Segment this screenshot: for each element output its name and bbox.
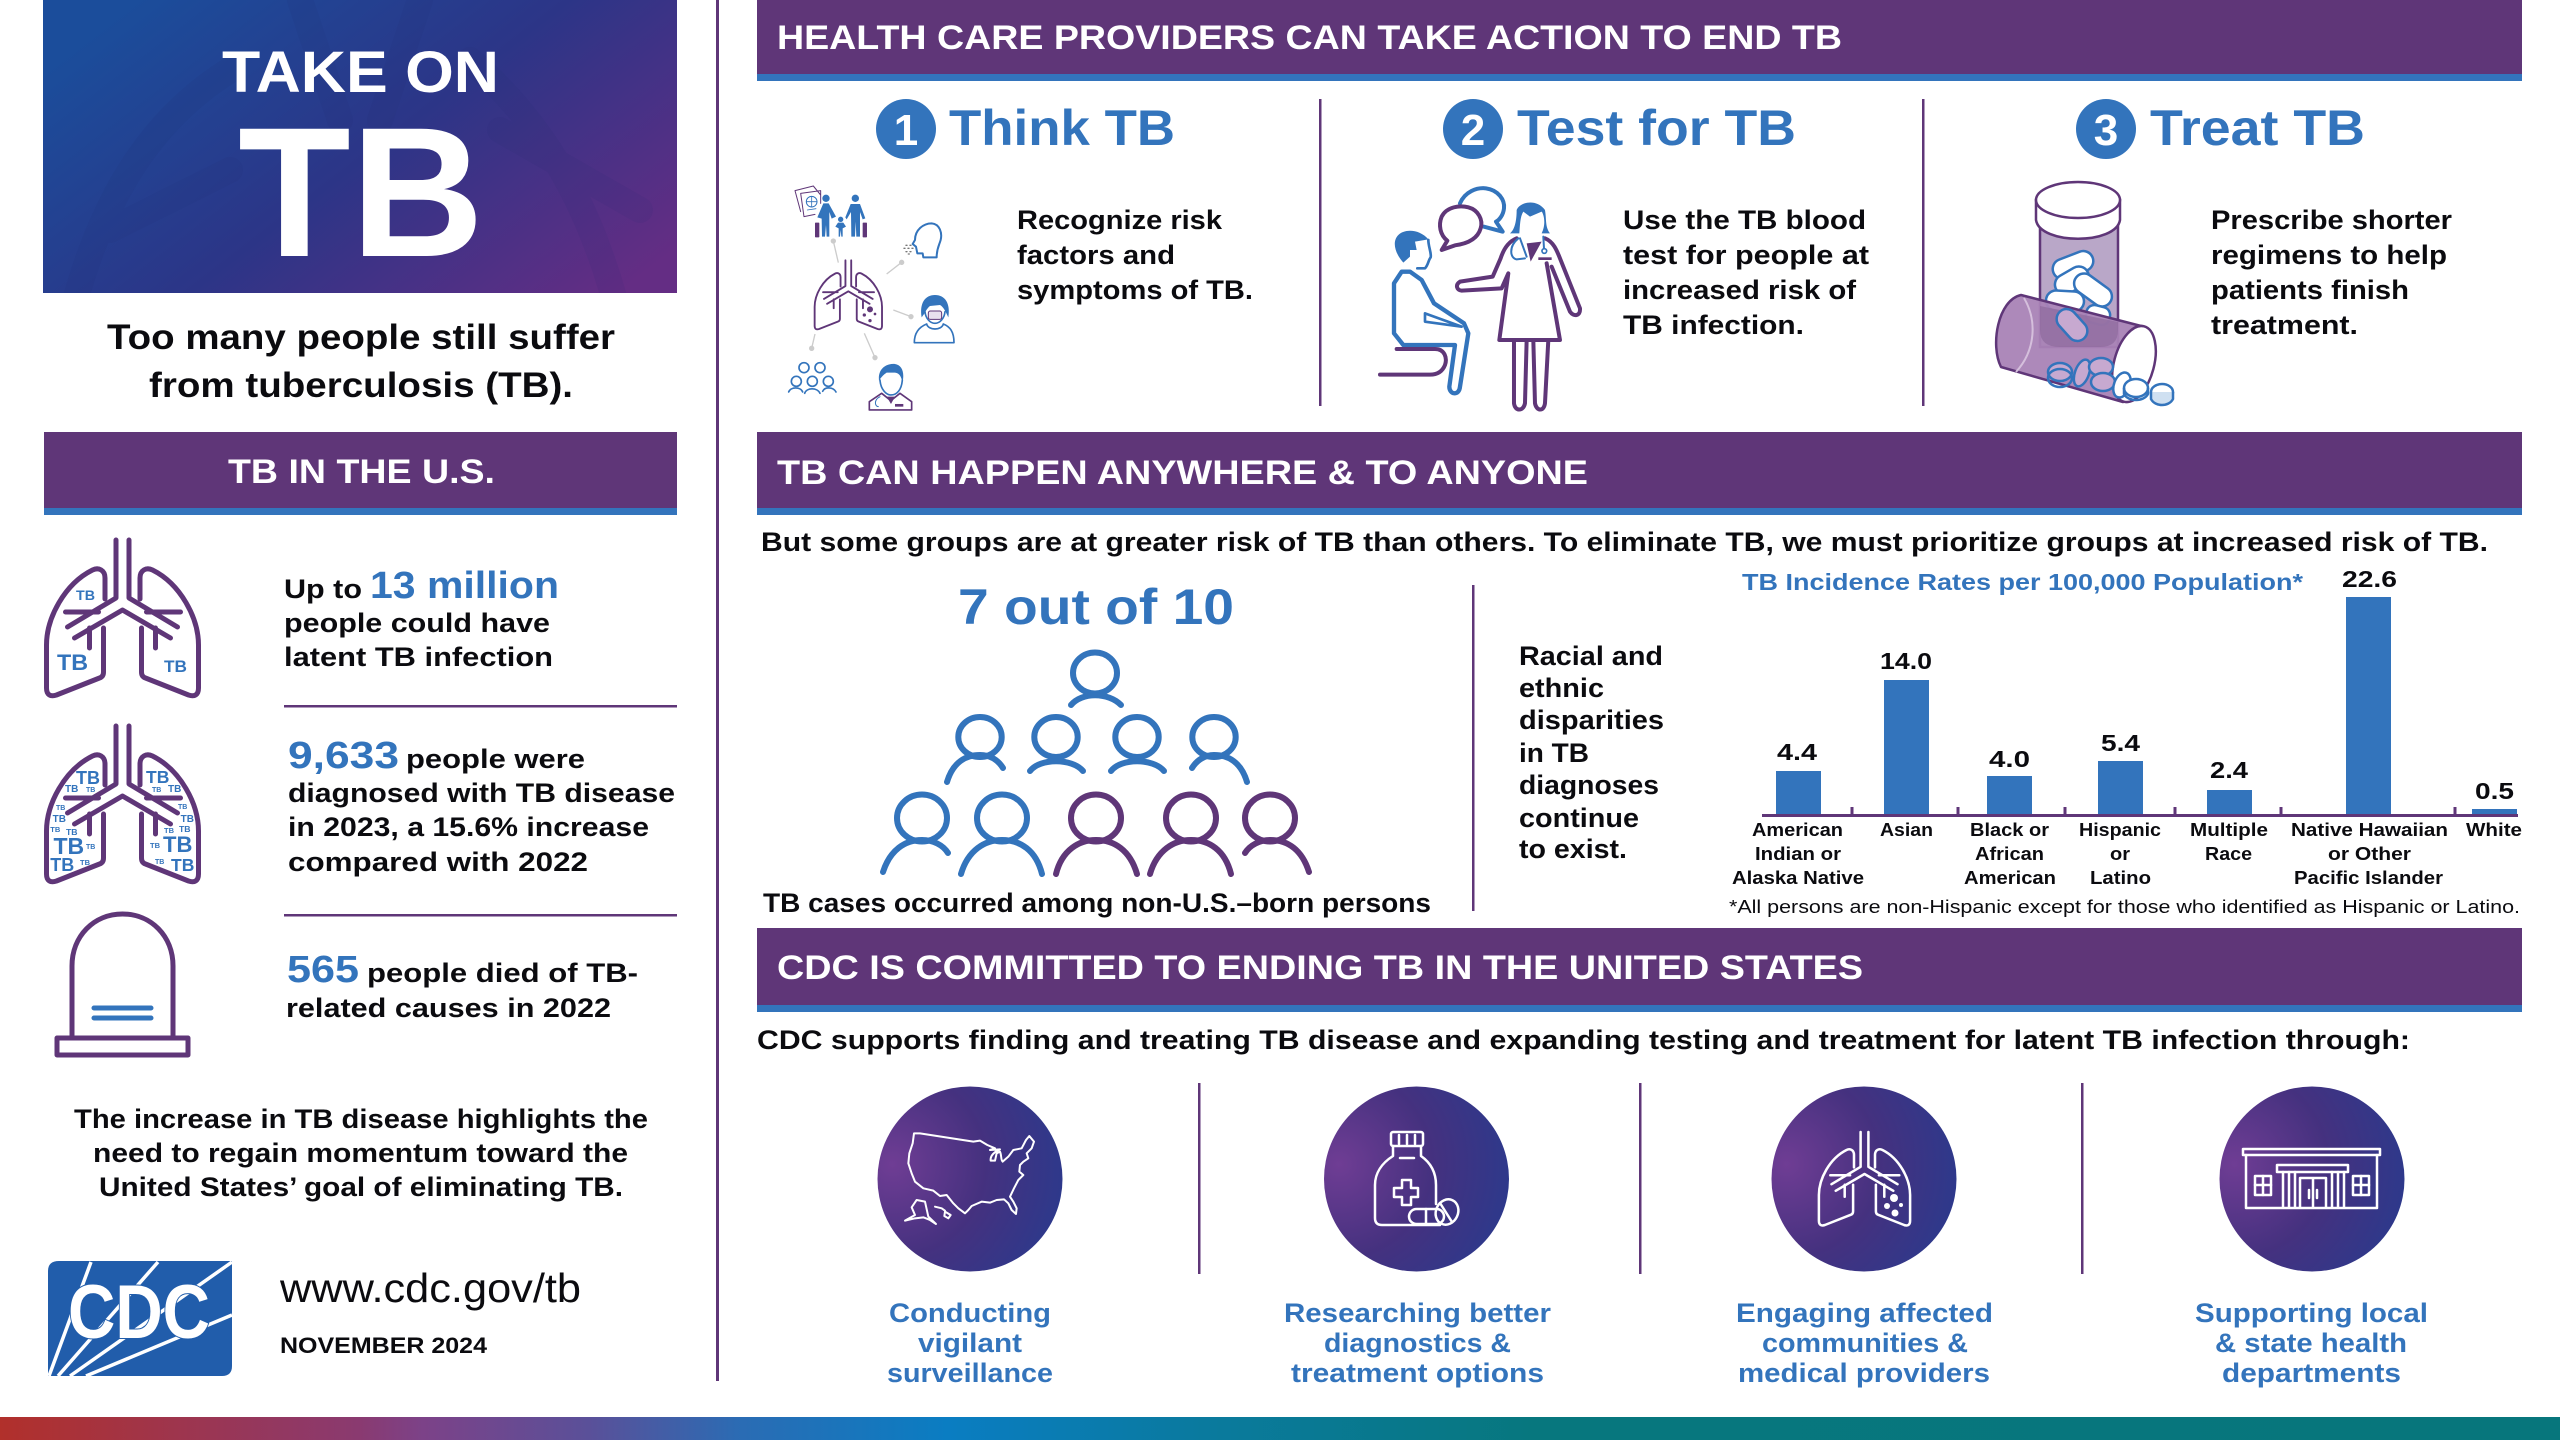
step 1 heading	[876, 99, 1175, 159]
stat: 13 million: Up to	[284, 574, 362, 604]
icon: group of people	[789, 363, 836, 393]
stat: 565: 565	[287, 949, 359, 991]
step 2 heading	[1443, 99, 1796, 159]
category labels: Latino	[2090, 868, 2151, 888]
step 3 text: regimens to help	[2211, 240, 2447, 270]
subtitle: from tuberculosis (TB).	[149, 366, 573, 405]
stat: 9,633: diagnosed with TB disease	[288, 778, 675, 808]
stat: 13 million: latent TB infection	[284, 642, 553, 672]
icon: lungs full of TB: TB	[181, 814, 194, 825]
heading: TB in the U.S.: TB IN THE U.S.	[228, 453, 495, 491]
subtitle: Too many people still suffer	[107, 318, 615, 357]
icon: lungs full of TB: TB	[66, 827, 78, 837]
closing statement: United States’ goal of eliminating TB.	[99, 1172, 623, 1202]
icon: doctor	[869, 364, 912, 410]
icon: lungs full of TB: TB	[80, 858, 91, 867]
category labels: Multiple	[2190, 820, 2268, 840]
stat: 9,633: 9,633	[288, 735, 399, 777]
step 1 heading: 1	[894, 106, 918, 155]
icon: lungs full of TB: TB	[86, 787, 95, 794]
intro sentence: But some groups are at greater risk of TB than others. To eliminate TB, we must prioritize groups at increased risk of TB.	[761, 527, 2488, 557]
values: 5.4	[2101, 730, 2140, 756]
icon: lungs full of TB: TB	[171, 855, 194, 875]
step 3 text: Prescribe shorter	[2211, 205, 2453, 235]
subtitle	[107, 318, 615, 405]
title: TAKE ON	[222, 40, 499, 105]
footnote: *All persons are non-Hispanic except for those who identified as Hispanic or Latino.	[1729, 897, 2520, 917]
icon: lungs full of TB: TB	[178, 804, 187, 811]
panel: CDC commitment	[757, 928, 2522, 1388]
category labels: American	[1752, 820, 1843, 840]
icon: doctor and patient talking	[1380, 188, 1580, 410]
icon: lungs full of TB	[46, 726, 198, 882]
closing statement: need to regain momentum toward the	[93, 1138, 628, 1168]
icon: risk factors network	[789, 186, 954, 410]
values: 4.0	[1989, 746, 2030, 772]
stat: 9,633: compared with 2022	[288, 847, 588, 877]
step 1 heading: Think TB	[949, 100, 1175, 156]
icon: lungs full of TB: TB	[179, 824, 191, 834]
category labels: Hispanic	[2079, 820, 2161, 840]
icon: lungs circle	[1772, 1086, 1956, 1272]
disparities text	[1519, 641, 1664, 864]
axis	[1762, 807, 2518, 816]
step 3 heading: Treat TB	[2150, 100, 2365, 156]
hero banner: TB	[238, 90, 484, 296]
category labels: or	[2110, 844, 2130, 864]
step 2 text: Use the TB blood	[1623, 205, 1866, 235]
icon: lungs full of TB: TB	[53, 814, 66, 825]
icon: lungs full of TB: TB	[152, 787, 161, 794]
disparities text: in TB	[1519, 738, 1589, 768]
icon: lungs full of TB: TB	[50, 855, 74, 875]
disparities text: diagnoses	[1519, 770, 1659, 800]
icon: lungs with few TB: TB	[164, 657, 187, 676]
step 2 text: TB infection.	[1623, 310, 1804, 340]
heading: TB in the U.S.	[44, 432, 677, 515]
caption: research: treatment options	[1291, 1358, 1544, 1388]
caption: research: diagnostics &	[1324, 1328, 1511, 1358]
CDC logo	[48, 1261, 232, 1376]
values: 4.4	[1777, 739, 1817, 765]
stat: 565	[286, 949, 638, 1023]
icon: lungs full of TB: TB	[86, 844, 95, 851]
heading	[757, 928, 2522, 1012]
icon: lungs full of TB: TB	[164, 826, 175, 835]
values	[1777, 566, 2514, 804]
stat: 565: people died of TB-	[367, 958, 638, 988]
icon: lungs full of TB: TB	[50, 825, 61, 834]
values: 14.0	[1880, 648, 1932, 674]
bars	[1776, 597, 2517, 815]
category labels: White	[2466, 820, 2522, 840]
icon: US map circle	[878, 1086, 1062, 1272]
caption: engagement	[1736, 1298, 1993, 1388]
category labels: Black or	[1970, 820, 2049, 840]
caption: engagement: Engaging affected	[1736, 1298, 1993, 1328]
bar chart: incidence rates	[1729, 566, 2522, 917]
icon: lungs with few TB: TB	[76, 587, 95, 603]
disparities text: to exist.	[1519, 834, 1627, 864]
values: 0.5	[2475, 778, 2514, 804]
icon: lungs full of TB: TB	[168, 784, 181, 795]
step 2 heading: Test for TB	[1517, 100, 1796, 156]
panel: health care providers	[757, 0, 2522, 410]
icon: lungs full of TB: TB	[56, 805, 65, 812]
category labels: Race	[2205, 844, 2252, 864]
heading: TB CAN HAPPEN ANYWHERE & TO ANYONE	[777, 454, 1588, 492]
category labels: American	[1964, 868, 2056, 888]
stat: 9,633: people were	[406, 744, 585, 774]
caption: engagement: medical providers	[1738, 1358, 1990, 1388]
category labels: Asian	[1880, 820, 1933, 840]
step 2 text	[1623, 205, 1869, 340]
icon: coughing head	[904, 223, 941, 257]
icon: health department building circle	[2220, 1086, 2404, 1272]
heading: HEALTH CARE PROVIDERS CAN TAKE ACTION TO END TB	[777, 19, 1842, 57]
heading	[757, 432, 2522, 515]
intro sentence: CDC supports finding and treating TB disease and expanding testing and treatment for latent TB infection through:	[757, 1025, 2410, 1055]
hero banner	[43, 0, 677, 320]
category labels	[1732, 820, 2522, 888]
CDC logo: CDC	[68, 1270, 210, 1355]
values: 2.4	[2210, 757, 2248, 783]
icon: lungs full of TB: TB	[54, 833, 84, 859]
caption: surveillance	[887, 1298, 1053, 1388]
stat: 13 million	[284, 565, 559, 672]
step 3 heading: 3	[2094, 106, 2118, 155]
stat: 565: related causes in 2022	[286, 993, 611, 1023]
disparities text: continue	[1519, 803, 1639, 833]
website and date: www.cdc.gov/tb	[279, 1265, 581, 1311]
caption: research: Researching better	[1284, 1298, 1552, 1328]
step 1 text	[1017, 205, 1253, 305]
values: 22.6	[2342, 566, 2397, 592]
stat: 9,633	[288, 735, 675, 877]
caption: health departments: departments	[2222, 1358, 2401, 1388]
closing statement	[74, 1104, 648, 1202]
icon: lungs full of TB: TB	[163, 832, 192, 857]
step 1 text: symptoms of TB.	[1017, 275, 1253, 305]
website and date: NOVEMBER 2024	[280, 1333, 488, 1358]
icon: family with passports	[795, 186, 867, 237]
category labels: Native Hawaiian	[2291, 820, 2448, 840]
step 3 heading	[2076, 99, 2365, 159]
step 1 text: factors and	[1017, 240, 1175, 270]
icon: woman with mask	[914, 295, 954, 343]
caption: surveillance: Conducting	[889, 1298, 1051, 1328]
step 2 text: test for people at	[1623, 240, 1869, 270]
footer gradient bar	[0, 1417, 2560, 1440]
closing statement: The increase in TB disease highlights the	[74, 1104, 648, 1134]
patient	[1380, 231, 1468, 393]
step 2 heading: 2	[1461, 106, 1485, 155]
doctor	[1457, 202, 1580, 410]
stat: 13 million: people could have	[284, 608, 550, 638]
step 1 text: Recognize risk	[1017, 205, 1223, 235]
panel: left column	[43, 0, 677, 1376]
caption: health departments: Supporting local	[2195, 1298, 2428, 1328]
website and date	[279, 1265, 581, 1358]
category labels: Indian or	[1755, 844, 1841, 864]
icon: lungs full of TB: TB	[150, 841, 161, 850]
icon: lungs full of TB: TB	[155, 859, 164, 866]
icon: lungs with few TB: TB	[57, 650, 88, 675]
panel: TB can happen anywhere	[757, 432, 2522, 918]
caption: health departments	[2195, 1298, 2428, 1388]
caption: research	[1284, 1298, 1552, 1388]
connectors	[810, 239, 913, 360]
category labels: Pacific Islander	[2294, 868, 2443, 888]
icon: medicine bottle circle	[1324, 1086, 1509, 1272]
chart title: TB Incidence Rates per 100,000 Population*	[1742, 569, 2303, 595]
disparities text: Racial and	[1519, 641, 1663, 671]
category labels: or Other	[2328, 844, 2411, 864]
stat: 7 out of 10: 7 out of 10	[958, 579, 1234, 635]
icon: tombstone	[57, 914, 188, 1055]
step 3 text: treatment.	[2211, 310, 2358, 340]
caption: surveillance: vigilant	[918, 1328, 1022, 1358]
step 3 text	[2211, 205, 2453, 340]
caption: engagement: communities &	[1762, 1328, 1968, 1358]
category labels: African	[1975, 844, 2044, 864]
heading: CDC IS COMMITTED TO ENDING TB IN THE UNITED STATES	[777, 949, 1863, 987]
stat: 13 million: 13 million	[370, 565, 559, 607]
caption: surveillance: surveillance	[887, 1358, 1053, 1388]
icon: lungs full of TB: TB	[65, 784, 78, 795]
disparities text: disparities	[1519, 705, 1664, 735]
icon: pill bottles	[1996, 182, 2173, 407]
speech bubbles	[1440, 188, 1504, 250]
pictogram: people	[883, 652, 1309, 874]
step 2 text: increased risk of	[1623, 275, 1857, 305]
category labels: Alaska Native	[1732, 868, 1864, 888]
icon: lungs full of TB: TB	[76, 768, 100, 788]
pictogram caption: TB cases occurred among non-U.S.–born persons	[763, 888, 1431, 918]
step 3 text: patients finish	[2211, 275, 2409, 305]
caption: health departments: & state health	[2215, 1328, 2407, 1358]
disparities text: ethnic	[1519, 673, 1604, 703]
icon: lungs with lesions	[815, 260, 882, 329]
stat: 9,633: in 2023, a 15.6% increase	[288, 812, 649, 842]
icon: lungs with few TB	[46, 540, 198, 696]
heading	[757, 0, 2522, 81]
icon: lungs full of TB: TB	[146, 767, 169, 787]
